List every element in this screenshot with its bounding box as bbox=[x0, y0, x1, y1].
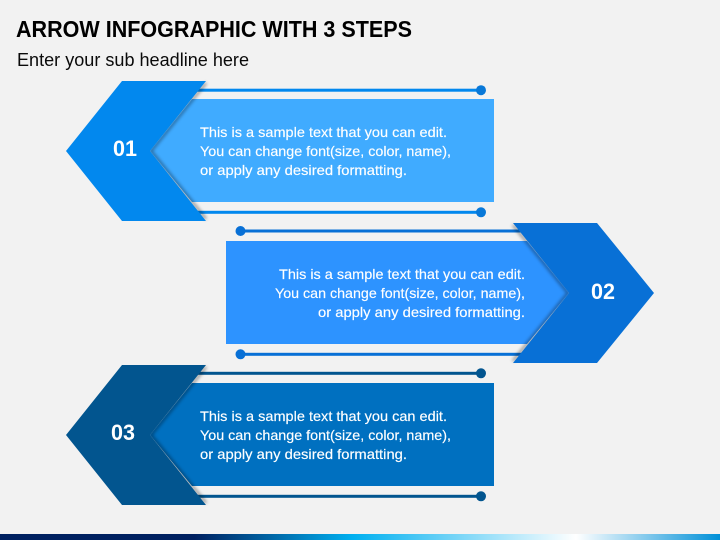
step 2 text bbox=[275, 266, 525, 320]
step 3 text: This is a sample text that you can edit. bbox=[200, 408, 447, 424]
step 1 chevron arrow bbox=[66, 81, 206, 221]
step 2 text panel bbox=[226, 241, 569, 344]
step 1 number: 01 bbox=[113, 136, 137, 161]
footer gradient bar bbox=[0, 534, 720, 540]
step 3 text panel bbox=[150, 383, 494, 486]
step 3 text: You can change font(size, color, name), bbox=[200, 427, 451, 443]
step 1 text: You can change font(size, color, name), bbox=[200, 143, 451, 159]
step 3 text bbox=[200, 408, 451, 462]
step 1 top connector line bbox=[190, 85, 486, 95]
step 2 bottom connector line bbox=[236, 349, 530, 359]
step 2 bbox=[226, 223, 654, 363]
step 2 chevron arrow bbox=[513, 223, 654, 363]
step 3 chevron arrow bbox=[66, 365, 206, 505]
subtitle: Enter your sub headline here bbox=[17, 50, 249, 70]
step 3 top connector line bbox=[190, 368, 486, 378]
step 1 bbox=[66, 81, 494, 221]
step 3 text: or apply any desired formatting. bbox=[200, 446, 407, 462]
step 1 text panel bbox=[150, 99, 494, 202]
step 3 bbox=[66, 365, 494, 505]
title: ARROW INFOGRAPHIC WITH 3 STEPS bbox=[16, 16, 412, 42]
step 2 text: You can change font(size, color, name), bbox=[275, 285, 525, 301]
step 2 text: This is a sample text that you can edit. bbox=[279, 266, 525, 282]
step 3 bottom connector line bbox=[190, 491, 486, 501]
step 2 top connector line bbox=[236, 226, 530, 236]
step 1 text bbox=[200, 124, 451, 178]
step 3 number: 03 bbox=[111, 420, 135, 445]
step 1 text: or apply any desired formatting. bbox=[200, 162, 407, 178]
step 2 number: 02 bbox=[591, 279, 615, 304]
step 1 bottom connector line bbox=[190, 207, 486, 217]
step 1 text: This is a sample text that you can edit. bbox=[200, 124, 447, 140]
step 2 text: or apply any desired formatting. bbox=[318, 304, 525, 320]
